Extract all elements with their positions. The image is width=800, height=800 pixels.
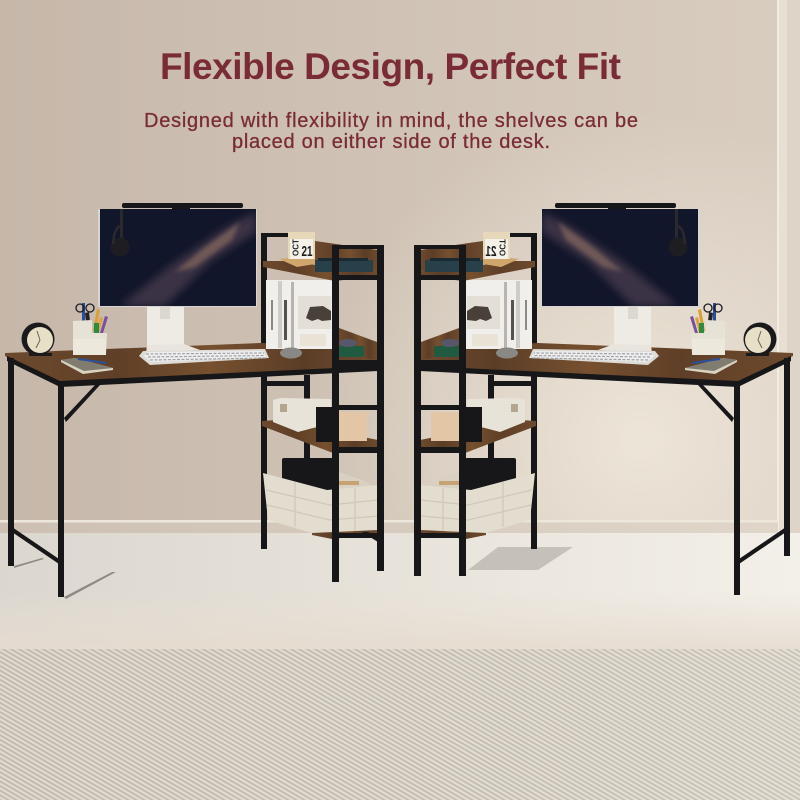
shelf floor shadow xyxy=(468,547,573,570)
mouse figurine xyxy=(496,348,518,358)
headphones xyxy=(668,209,688,256)
calendar: OCT xyxy=(498,239,506,256)
floor xyxy=(0,533,800,651)
calendar xyxy=(279,232,315,267)
middle shelf rails xyxy=(339,405,378,453)
monitor xyxy=(98,203,257,353)
rug xyxy=(0,649,800,800)
light bar xyxy=(555,203,676,211)
top shelf back panel xyxy=(420,241,483,272)
black storage box xyxy=(465,458,516,490)
light bar xyxy=(122,203,243,211)
bottom shelf xyxy=(312,528,378,542)
green tray xyxy=(333,339,364,357)
keyboard xyxy=(139,349,269,365)
headphones xyxy=(110,209,130,256)
middle shelf rails xyxy=(420,405,459,453)
baseboard xyxy=(0,520,778,533)
calendar: OCT xyxy=(292,239,300,256)
subtitle: Designed with flexibility in mind, the shelves can be xyxy=(144,110,638,132)
top shelf back panel xyxy=(315,241,378,272)
desk edge and frame xyxy=(7,356,378,387)
left desk with shelves on the right xyxy=(5,203,384,599)
desk legs xyxy=(698,358,790,595)
cream box xyxy=(466,398,525,432)
monitor stand xyxy=(146,306,200,353)
lower shelf panel xyxy=(339,328,377,360)
top shelf xyxy=(420,261,535,281)
front shelf posts xyxy=(332,245,384,582)
front shelf posts xyxy=(414,245,466,576)
calendar: 21 xyxy=(302,243,312,260)
bottom shelf xyxy=(420,528,486,539)
top shelf tray xyxy=(425,258,483,272)
back shelf posts xyxy=(261,233,310,549)
monitor xyxy=(541,203,700,353)
keyboard xyxy=(529,349,659,365)
subtitle xyxy=(144,110,638,153)
calendar xyxy=(483,232,519,267)
black and tan box xyxy=(431,407,482,442)
black storage box xyxy=(282,458,333,490)
front post overlay xyxy=(332,360,384,582)
desk top xyxy=(420,343,793,382)
top shelf tray xyxy=(315,258,373,272)
books xyxy=(266,280,332,349)
green tray xyxy=(434,339,465,357)
pen holder xyxy=(73,303,108,355)
basket xyxy=(420,472,535,533)
subtitle: placed on either side of the desk. xyxy=(232,131,550,153)
top shelf xyxy=(263,261,378,281)
pen holder xyxy=(690,303,725,355)
mouse figurine xyxy=(280,348,302,358)
calendar: 21 xyxy=(486,243,496,260)
desk edge and frame xyxy=(420,356,791,387)
clock xyxy=(744,322,776,356)
back shelf posts xyxy=(488,233,537,549)
clock xyxy=(22,322,54,356)
floor shadows xyxy=(14,558,116,599)
middle shelf xyxy=(262,420,378,453)
screen xyxy=(541,209,700,307)
cream box xyxy=(273,398,332,432)
desk legs xyxy=(8,358,100,597)
lower shelf panel xyxy=(421,328,459,360)
desk top xyxy=(5,343,378,382)
wall background xyxy=(0,0,800,533)
front post overlay xyxy=(414,360,466,576)
right desk with shelves on the left xyxy=(414,203,793,595)
black and tan box xyxy=(316,407,367,442)
basket xyxy=(263,472,378,533)
notebook and pen xyxy=(61,358,113,374)
screen xyxy=(98,209,257,307)
notebook and pen xyxy=(685,358,737,374)
middle shelf xyxy=(420,420,536,453)
monitor stand xyxy=(598,306,652,353)
books xyxy=(466,280,532,349)
title: Flexible Design, Perfect Fit xyxy=(160,46,621,87)
